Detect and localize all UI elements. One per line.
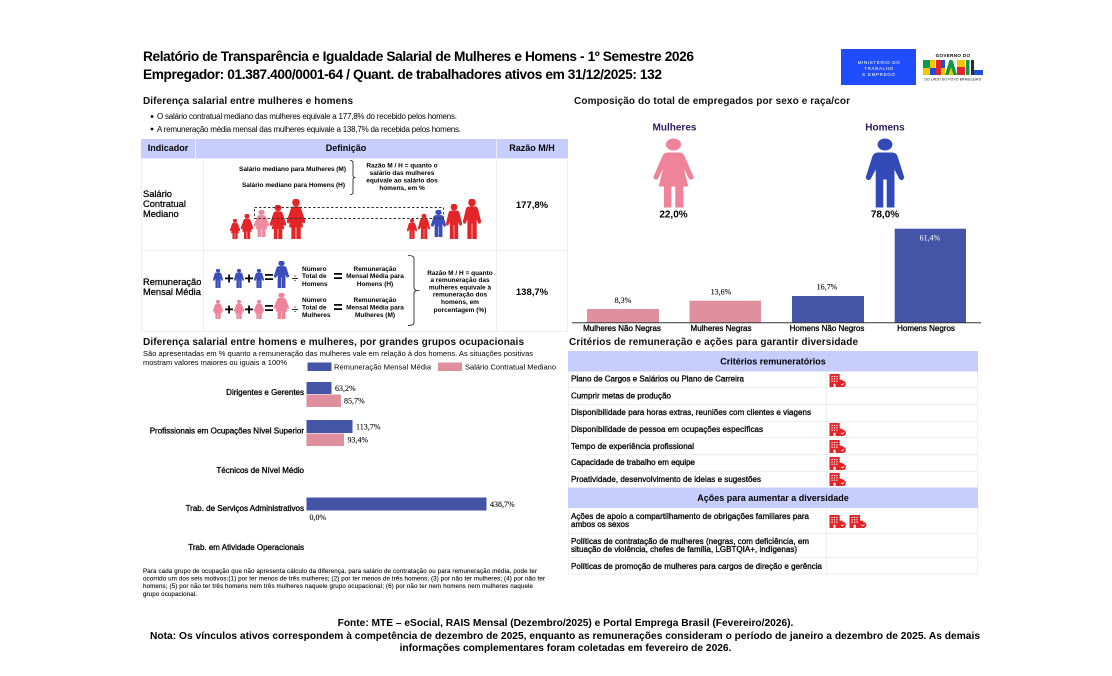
rows: ações — [571, 512, 823, 571]
rows: critérios: Disponibilidade para horas extras, reuniões com clientes e viagens — [571, 408, 811, 417]
big bracket — [408, 256, 420, 326]
section heading: composição: Composição do total de empregados por sexo e raça/cor — [574, 96, 850, 107]
rows: critérios: Disponibilidade de pessoa em ocupações específicas — [571, 425, 763, 434]
definition text: razão média — [427, 270, 493, 314]
group: operacionais: Trab. em Atividade Operacionais — [188, 543, 304, 552]
icon: mulheres: 22,0% — [659, 210, 688, 220]
footer: informações complementares foram coletadas em fevereiro de 2026. — [400, 643, 732, 654]
formula text: mulheres: Remuneração — [354, 297, 397, 304]
legend: Remuneração Mensal Média — [334, 362, 432, 372]
formula: homens — [213, 261, 289, 288]
row label: remuneração — [143, 277, 202, 297]
title: Relatório de Transparência e Igualdade Salarial de Mulheres e Homens - 1º Semestre 2026 — [143, 49, 694, 64]
legend: Salário Contratual Mediano — [465, 362, 556, 372]
rows: ações: Ações de apoio a compartilhamento de obrigações familiares para — [571, 512, 810, 521]
rows: critérios: Proatividade, desenvolvimento de ideias e sugestões — [571, 475, 761, 484]
bullets: O salário contratual mediano das mulheres equivale a 177,8% do recebido pelos homens. — [157, 112, 457, 121]
formula text: homens: Total de — [302, 273, 327, 280]
dashed median box — [254, 208, 444, 218]
group: dirigentes: 63,2% — [335, 384, 356, 393]
group: administrativos: 438,7% — [490, 500, 515, 509]
definition text: razão média: mulheres equivale à — [429, 284, 491, 292]
rows: ações: ambos os sexos — [571, 520, 629, 529]
formula text: homens: Mensal Média para — [346, 273, 404, 280]
formula text: mulheres: + — [244, 302, 254, 318]
rows: critérios: Tempo de experiência profissional — [571, 442, 694, 451]
table header: Razão M/H — [509, 143, 555, 153]
rows: critérios — [571, 374, 811, 484]
row label: salário contratual: Mediano — [143, 209, 179, 219]
definition text: mediana: Razão M / H = quanto o — [366, 162, 438, 170]
subtitle text: mostram valores maiores ou iguais a 100% — [143, 358, 287, 367]
definition text: mediana: salário das mulheres — [370, 170, 435, 177]
definition text: mediana: Salário mediano para Homens (H) — [242, 182, 345, 189]
icon: homens — [865, 122, 905, 220]
formula text: homens: + — [244, 270, 254, 288]
footer: Fonte: MTE – eSocial, RAIS Mensal (Dezembro/2025) e Portal Emprega Brasil (Fevereiro/2026). — [338, 618, 794, 629]
formula text: homens: + — [224, 270, 234, 288]
group: administrativos: 0,0% — [310, 513, 326, 522]
logo: ministério: E EMPREGO — [862, 72, 896, 77]
panel: tabela de indicadores — [141, 139, 568, 332]
value: 177,8%: 177,8% — [516, 200, 549, 211]
legend — [308, 362, 556, 372]
bullets — [151, 112, 461, 134]
formula text: mulheres: + — [224, 302, 234, 318]
footer — [150, 618, 980, 654]
icon: mulheres: Mulheres — [653, 122, 697, 134]
rows: ações: Políticas de contratação de mulheres (negras, com deficiência, em — [571, 537, 809, 546]
logo: governo do brasil: GOVERNO DO — [936, 53, 970, 58]
value: 138,7%: 138,7% — [516, 287, 549, 298]
logo: ministério — [841, 49, 916, 85]
group: administrativos — [186, 498, 515, 522]
formula text: homens: Homens (H) — [357, 281, 393, 288]
table header: Definição — [326, 143, 367, 153]
formula text: homens: Homens — [302, 281, 328, 288]
definition text: razão média: remuneração dos — [433, 292, 487, 298]
definition text: razão média: porcentagem (%) — [434, 307, 486, 314]
group: profissionais: Profissionais em Ocupações Nível Superior — [150, 426, 304, 436]
bar chart: composição: Mulheres Negras — [691, 324, 751, 333]
group: dirigentes — [226, 382, 365, 407]
formula text: mulheres: ÷ — [292, 302, 299, 316]
title: Empregador: 01.387.400/0001-64 / Quant. de trabalhadores ativos em 31/12/2025: 132 — [143, 67, 662, 82]
row label: remuneração: Mensal Média — [143, 287, 202, 297]
definition text: mediana: equivale ao salário dos — [366, 178, 438, 184]
bar chart: composição — [572, 229, 981, 333]
icons: empresa — [830, 374, 846, 486]
subtitle text: São apresentadas em % quanto a remuneração das mulheres vale em relação à dos homens. As situações positivas — [143, 349, 533, 358]
definition text: mediana: Salário mediano para Mulheres (M) — [239, 166, 346, 173]
formula text: mulheres: Mulheres — [302, 312, 331, 319]
header: ações: Ações para aumentar a diversidade — [697, 493, 849, 503]
subtitle text — [143, 349, 533, 367]
header: critérios remuneratórios — [568, 351, 978, 372]
bar chart: composição: Homens Negros — [897, 324, 955, 333]
icon: mediana homens — [407, 199, 481, 239]
panel: critérios e ações — [568, 351, 978, 574]
definition text: razão média: Razão M / H = quanto — [427, 270, 493, 277]
definition text: mediana: homens, em % — [379, 185, 425, 192]
section heading: grupos ocupacionais: Diferença salarial entre homens e mulheres, por grandes grupos ocupacionais — [143, 337, 524, 348]
bar chart: composição: 16,7% — [817, 282, 838, 292]
header: ações — [568, 488, 978, 508]
group: profissionais: 113,7% — [356, 422, 381, 432]
bar chart: composição: 8,3% — [615, 296, 632, 305]
row label: salário contratual: Contratual — [143, 199, 186, 209]
group: profissionais — [150, 420, 381, 446]
bar chart: composição: Mulheres Não Negras — [583, 324, 661, 333]
footnote — [143, 568, 545, 598]
group: profissionais: 93,4% — [348, 436, 368, 444]
rows: ações: situação de violência, chefes de família, LGBTQIA+, indígenas) — [571, 545, 797, 554]
title — [143, 49, 694, 82]
section heading: critérios: Critérios de remuneração e ações para garantir diversidade — [569, 337, 858, 348]
formula text: mulheres: Mulheres (M) — [355, 312, 395, 319]
formula text: homens: Remuneração — [354, 266, 397, 273]
formula text: homens: = — [264, 270, 274, 286]
bar chart: composição: 13,6% — [711, 288, 732, 296]
rows: critérios: Cumprir metas de produção — [571, 392, 672, 400]
bar chart: composição: Homens Não Negros — [790, 324, 864, 333]
formula: mulheres — [213, 293, 289, 319]
bullets: A remuneração média mensal das mulheres equivale a 138,7% da recebida pelos homens. — [157, 125, 461, 134]
formula text: homens: Número — [302, 266, 327, 273]
logo: ministério: TRABALHO — [864, 66, 894, 71]
row label: salário contratual — [143, 189, 186, 219]
icon: mediana mulheres — [230, 199, 305, 239]
footnote: grupo ocupacional. — [143, 591, 197, 598]
row label: salário contratual: Salário — [143, 189, 172, 199]
formula text: mulheres: Número — [302, 297, 327, 304]
formula text: mulheres — [224, 297, 404, 319]
formula text: mulheres: = — [333, 300, 343, 316]
definition text: mediana — [239, 160, 438, 194]
header: critérios remuneratórios: Critérios remuneratórios — [720, 356, 826, 366]
group: dirigentes: 85,7% — [344, 396, 365, 406]
footnote: ocorrido um dos seis motivos:(1) por ter menos de três mulheres; (2) por ter menos de três homens; (3) por não ter mulheres; (4) por não ter — [143, 576, 545, 582]
row label: remuneração: Remuneração — [143, 277, 201, 287]
table header: Indicador — [148, 143, 189, 153]
formula text: homens: = — [333, 268, 343, 286]
rows: ações: Políticas de promoção de mulheres para cargos de direção e gerência — [571, 562, 823, 571]
footnote: Para cada grupo de ocupação que não apresenta cálculo da diferença, para salário de contratação ou para remuneração média, pode ter — [143, 568, 537, 575]
icon: homens: Homens — [865, 122, 905, 134]
logo: ministério: MINISTÉRIO DO — [858, 59, 900, 65]
logo: governo do brasil: DO LADO DO POVO BRASILEIRO — [924, 78, 982, 82]
icon: homens: 78,0% — [871, 210, 899, 220]
formula text: mulheres: Mensal Média para — [346, 304, 404, 312]
formula text: homens: ÷ — [292, 272, 299, 286]
section heading: diferença salarial: Diferença salarial entre mulheres e homens — [143, 96, 353, 107]
rows: critérios: Capacidade de trabalho em equipe — [571, 458, 696, 467]
group: dirigentes: Dirigentes e Gerentes — [226, 388, 304, 397]
formula text: mulheres: Total de — [302, 304, 327, 312]
bar chart: composição: 61,4% — [920, 234, 941, 242]
logo: governo do brasil — [923, 53, 983, 82]
definition text: razão média: homens, em — [441, 299, 479, 306]
definition text: razão média: a remuneração das — [430, 277, 490, 284]
group: administrativos: Trab. de Serviços Administrativos — [186, 504, 304, 513]
rows: critérios: Plano de Cargos e Salários ou Plano de Carreira — [571, 374, 745, 384]
bar chart: grupos ocupacionais — [150, 382, 515, 552]
formula text: homens — [224, 266, 404, 288]
footer: Nota: Os vínculos ativos correspondem à competência de dezembro de 2025, enquanto as remunerações consideram o período de janeiro a dezembro de 2025. As demais — [150, 631, 980, 642]
table header — [141, 139, 568, 158]
footnote: homens; (5) por não ter três homens nem três mulheres naquele grupo ocupacional; (6) por não ter nem homens nem mulheres naquele — [143, 583, 534, 590]
icons: empresa ações — [830, 515, 866, 528]
group: técnicos: Técnicos de Nível Médio — [216, 466, 305, 475]
icon: mulheres — [653, 122, 697, 220]
formula text: mulheres: = — [264, 300, 274, 318]
